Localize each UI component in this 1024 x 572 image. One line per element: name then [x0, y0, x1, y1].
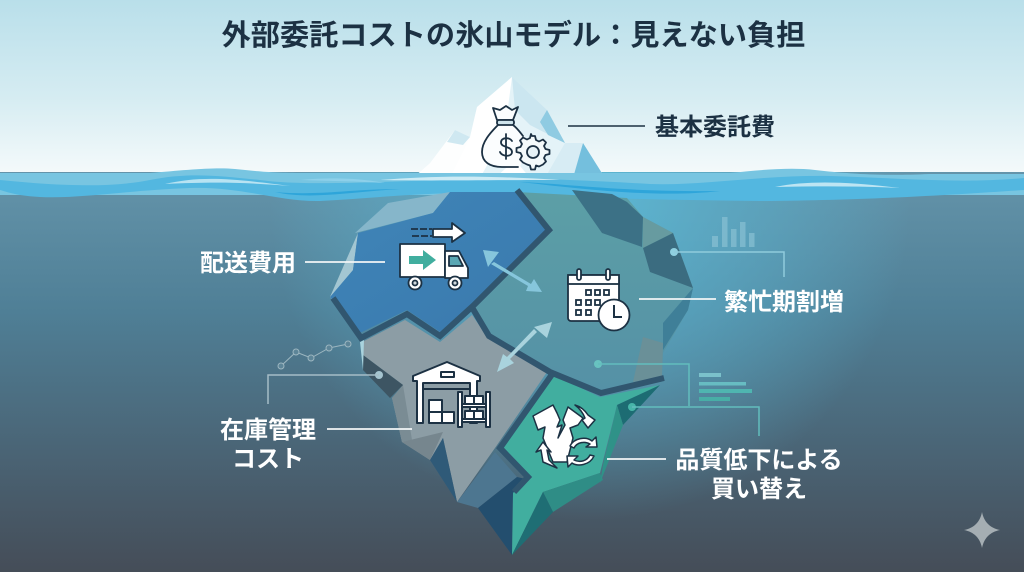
arrow: delivery to peak season	[483, 250, 542, 292]
label: inventory cost: コスト	[232, 446, 304, 473]
facets: right shadow	[572, 190, 693, 382]
icon: warehouse	[413, 362, 490, 427]
icon: broken arrows and recycle	[533, 405, 597, 468]
label: inventory cost	[220, 417, 412, 473]
blue section	[330, 192, 547, 333]
facet: dark slate left	[363, 355, 403, 398]
dark dividing seams	[333, 190, 664, 492]
iceberg below water	[330, 190, 693, 555]
icon: calendar with clock	[568, 269, 630, 330]
icon: money bag and gear	[482, 106, 550, 170]
label: peak surcharge: 繁忙期割増	[724, 289, 844, 316]
facet: lower dark blue	[430, 438, 457, 502]
label: quality replacement: 品質低下による	[675, 447, 843, 474]
label: quality replacement: 買い替え	[711, 476, 807, 503]
icon: sparkle	[964, 512, 1000, 548]
label: quality replacement	[607, 447, 843, 503]
facets: left light	[330, 192, 450, 325]
sky background	[0, 0, 1024, 175]
connector and list icon: quality	[594, 360, 759, 436]
label: basic fee: 基本委託費	[655, 114, 775, 141]
icon: delivery truck	[400, 223, 468, 290]
water surface waves	[0, 168, 1024, 201]
deep sea background	[0, 172, 1024, 572]
grey section	[362, 315, 547, 502]
label: inventory cost: 在庫管理	[220, 417, 316, 444]
iceberg above water	[413, 77, 605, 178]
green section	[503, 375, 660, 555]
connector and line chart icon: inventory	[268, 341, 383, 404]
title: 外部委託コストの氷山モデル：見えない負担	[222, 18, 805, 52]
facet: teal centre body	[473, 192, 693, 390]
connector and bar icon: peak surcharge	[670, 217, 784, 277]
arrow: peak season to inventory	[497, 322, 552, 372]
label: delivery cost: 配送費用	[200, 250, 296, 277]
